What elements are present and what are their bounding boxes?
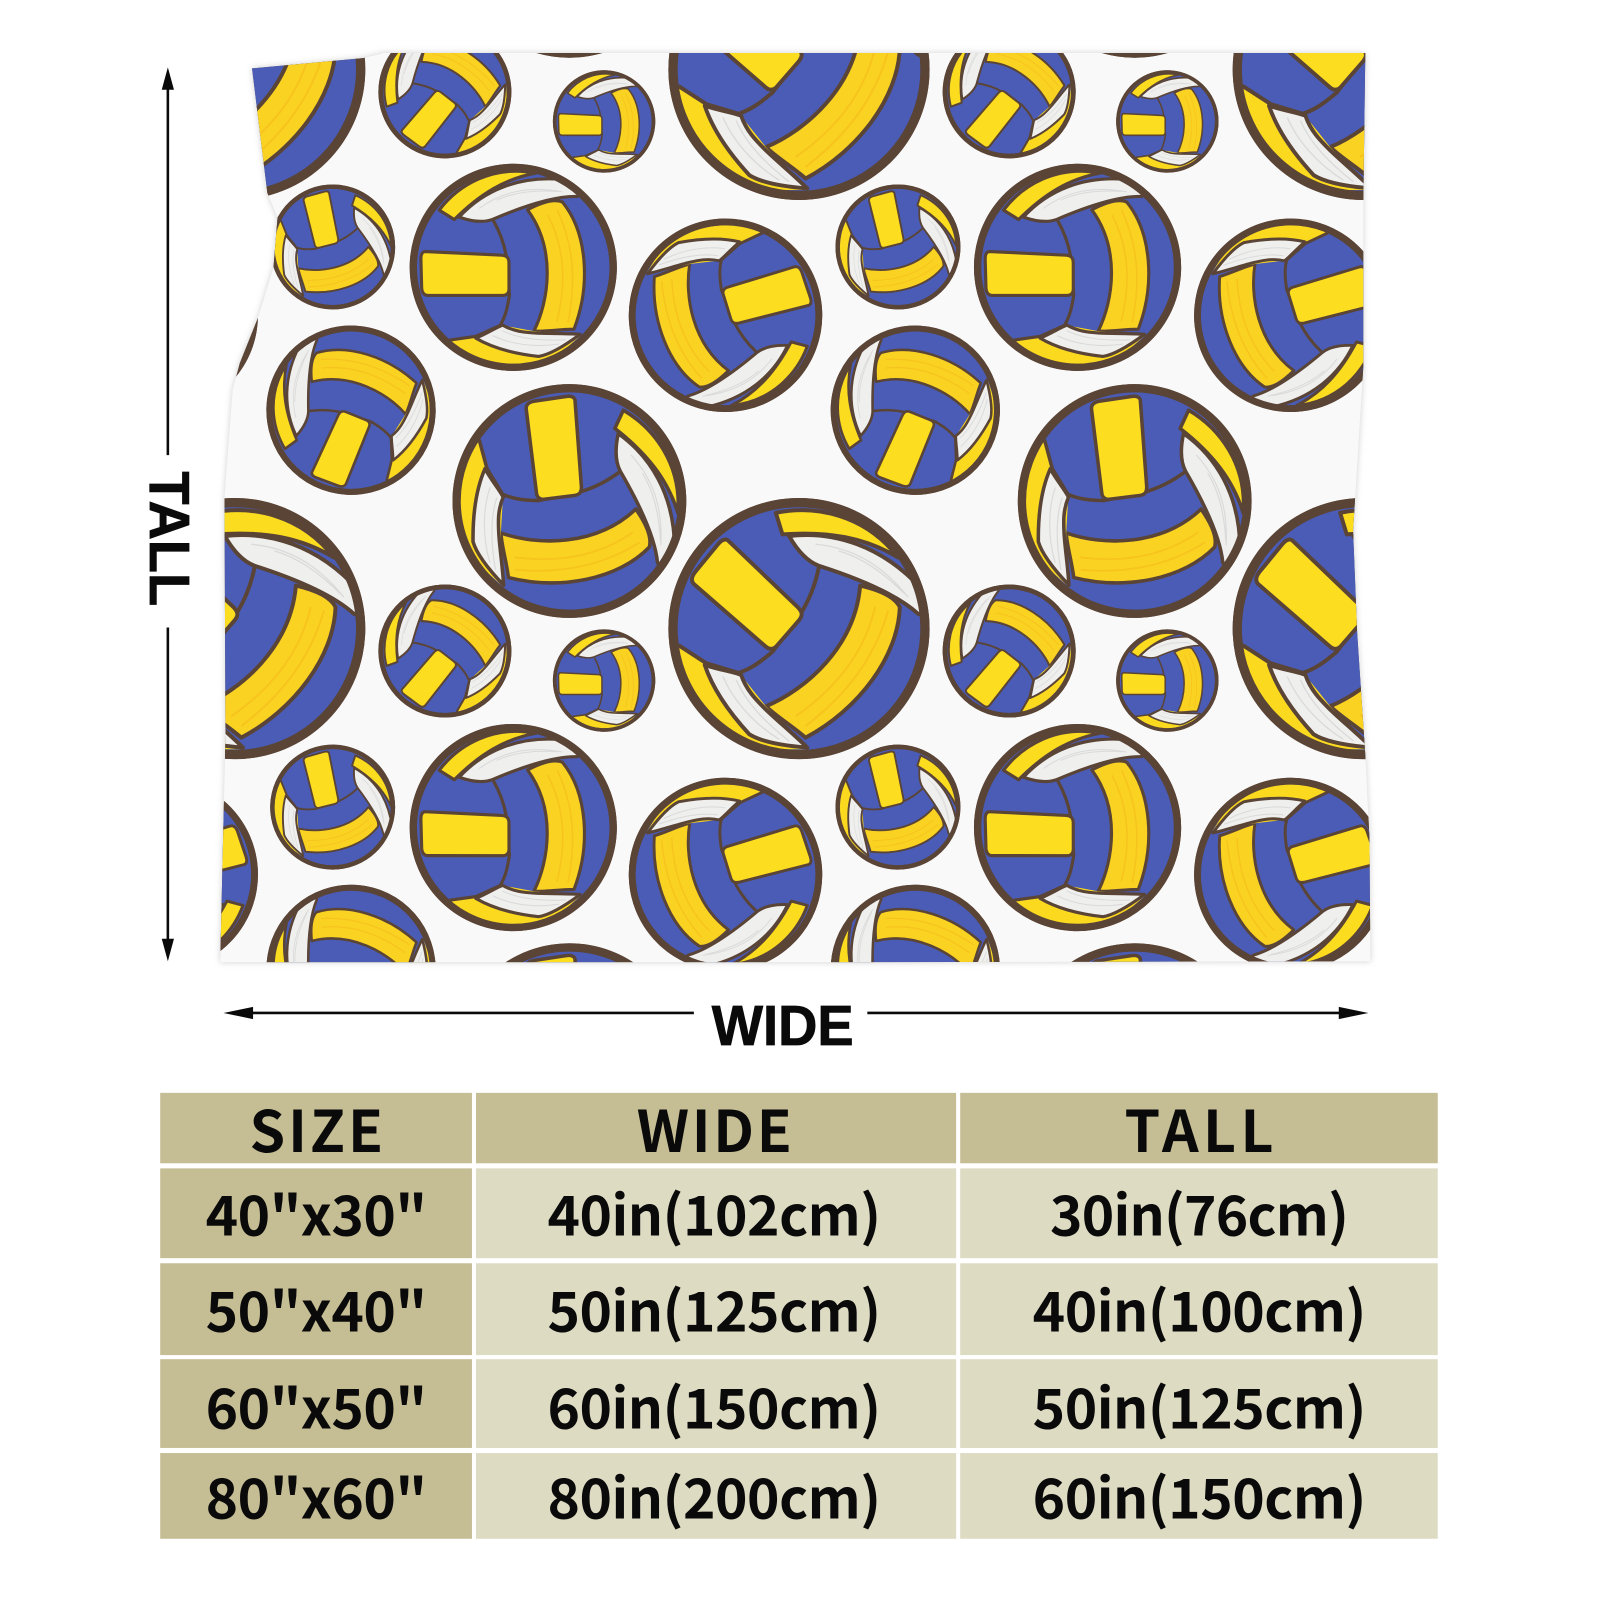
table row 80x60: 60in(150cm) <box>1033 1454 1366 1534</box>
label: WIDE: WIDE <box>712 994 854 1057</box>
table row 60x50: 50in(125cm) <box>1033 1365 1366 1445</box>
table header row: SIZE <box>249 1087 383 1169</box>
table row 40x30 <box>160 1168 1438 1258</box>
balls with horizontal panel <box>367 121 1224 974</box>
table row 50x40 <box>160 1263 1438 1355</box>
table row 80x60: 80in(200cm) <box>547 1454 881 1534</box>
table row 50x40: 50"x40" <box>206 1268 427 1348</box>
table header row <box>160 1087 1438 1169</box>
smallest balls <box>552 70 1219 732</box>
table row 40x30: 30in(76cm) <box>1050 1172 1349 1252</box>
table row 40x30: 40"x30" <box>206 1172 427 1252</box>
large balls row 2 <box>104 498 1494 759</box>
arrow: wide dimension <box>223 1007 1368 1019</box>
panel: volleyball blanket <box>220 53 1370 962</box>
balls with panel on upper right <box>28 182 1424 1008</box>
table row 40x30: 40in(102cm) <box>547 1172 881 1252</box>
arrow: tall dimension <box>162 67 174 961</box>
table row 80x60 <box>160 1453 1438 1539</box>
label: TALL: TALL <box>138 471 201 606</box>
table header row: TALL <box>1124 1087 1273 1169</box>
table row 60x50: 60"x50" <box>206 1365 427 1445</box>
table row 50x40: 50in(125cm) <box>547 1268 881 1348</box>
table: size chart <box>160 1087 1438 1539</box>
small balls with diagonal panel <box>375 22 1079 721</box>
table row 50x40: 40in(100cm) <box>1033 1268 1366 1348</box>
table row 60x50: 60in(150cm) <box>547 1365 881 1445</box>
balls with vertical panel on top <box>404 0 1300 1225</box>
large balls row 1 <box>104 0 1494 200</box>
table row 80x60: 80"x60" <box>206 1454 427 1534</box>
blanket shadow <box>220 53 1370 962</box>
balls with panel at bottom <box>243 303 1023 1077</box>
table header row: WIDE <box>637 1087 792 1169</box>
small balls with top panel <box>246 160 985 894</box>
table row 60x50 <box>160 1359 1438 1448</box>
